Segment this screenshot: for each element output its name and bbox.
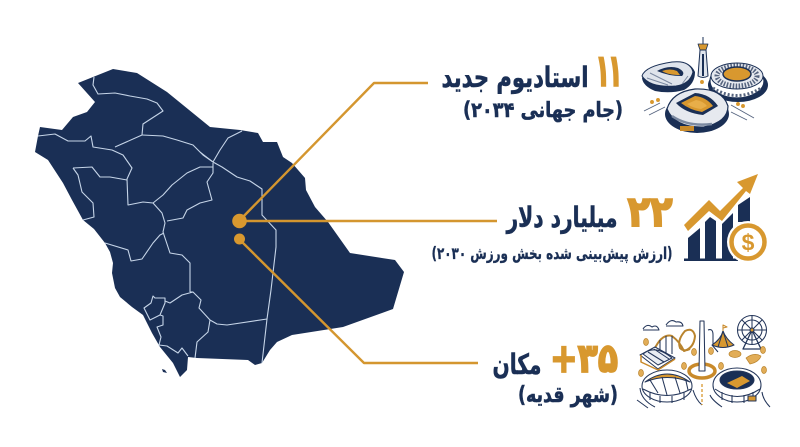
subheading 1: (جام جهانی ۲۰۳۴) xyxy=(463,98,623,122)
icon: growth chart with coin xyxy=(684,174,769,263)
icon: stadiums xyxy=(642,37,768,133)
heading 2: میلیارد دلار xyxy=(505,201,618,234)
ferris wheel xyxy=(738,316,766,349)
roller coaster xyxy=(654,330,718,354)
icon: Qiddiya city xyxy=(637,316,770,408)
bars xyxy=(684,197,750,261)
number 35+: +۳۵ xyxy=(550,336,618,382)
coin: $ xyxy=(742,230,755,256)
stat 3: venues xyxy=(492,336,618,408)
islands xyxy=(162,369,167,373)
region borders xyxy=(38,77,276,363)
trees xyxy=(638,338,766,376)
left stadium xyxy=(642,62,695,92)
marker: small dot xyxy=(234,234,245,244)
paths and trees xyxy=(644,80,754,120)
tower xyxy=(698,37,708,78)
arrow xyxy=(684,174,758,231)
number 22: ۲۲ xyxy=(628,187,673,236)
subheading 3: (شهر قدیه) xyxy=(518,383,618,408)
heading 1: استادیوم جدید xyxy=(442,61,588,94)
stat 2: billion dollars xyxy=(432,187,673,264)
subheading 2: (ارزش پیش‌بینی شده بخش ورزش ۲۰۳۰) xyxy=(432,244,672,264)
stat 1: stadiums xyxy=(442,46,623,122)
map outline xyxy=(35,69,404,377)
front stadium xyxy=(665,89,729,133)
connector lines xyxy=(239,83,497,363)
top left dome xyxy=(640,347,675,370)
lower left stadium xyxy=(637,370,702,408)
map: Saudi Arabia xyxy=(35,69,404,377)
central tower xyxy=(689,321,715,378)
tent xyxy=(712,325,734,348)
marker: large dot xyxy=(232,214,247,228)
right stadium xyxy=(708,63,768,102)
heading 3: مکان xyxy=(492,348,542,381)
stat 1: stadiums: ۱۱ xyxy=(596,46,622,95)
lower right stadium xyxy=(710,368,770,407)
clouds xyxy=(643,321,683,330)
road xyxy=(701,384,703,405)
